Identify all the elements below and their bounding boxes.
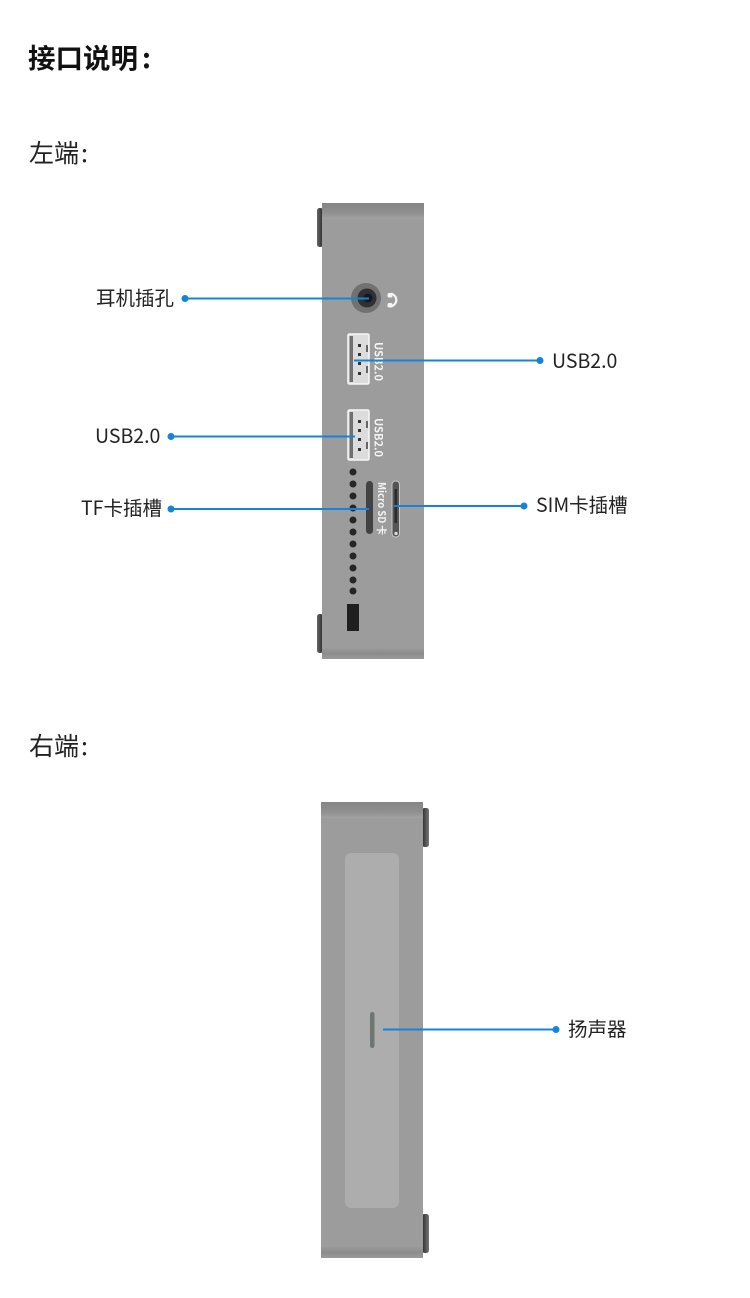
callout: USB2.0 left xyxy=(95,420,355,449)
callout: TF card slot: TF卡插槽 xyxy=(81,492,162,521)
vent holes xyxy=(350,468,356,594)
USB label bottom: USB2.0 xyxy=(370,418,386,457)
callout: SIM card slot xyxy=(394,489,628,518)
callout: headphone jack xyxy=(96,282,369,311)
callout: SIM card slot: SIM卡插槽 xyxy=(536,489,628,518)
device feet xyxy=(317,208,323,653)
heading: left side: 左端: xyxy=(29,134,88,170)
callout: USB2.0 left: USB2.0 xyxy=(95,420,160,449)
device: right side view xyxy=(321,802,429,1258)
speaker panel xyxy=(345,853,399,1208)
USB port bottom xyxy=(348,410,369,460)
SIM card slot xyxy=(392,481,400,537)
USB port top xyxy=(348,334,369,384)
power switch xyxy=(347,604,359,631)
device feet xyxy=(422,808,429,1253)
device body xyxy=(321,802,423,1258)
device: left side view xyxy=(317,203,424,659)
callout: speaker: 扬声器 xyxy=(568,1013,627,1042)
device body xyxy=(322,203,424,659)
callout: USB2.0 right xyxy=(354,345,617,374)
callout: headphone jack: 耳机插孔 xyxy=(96,282,174,311)
USB label top: USB2.0 xyxy=(370,342,386,381)
icon: headphones xyxy=(388,293,396,308)
callout: TF card slot xyxy=(81,492,369,521)
heading: right side: 右端: xyxy=(29,727,88,763)
speaker slot xyxy=(370,1012,374,1048)
headphone jack xyxy=(351,283,381,313)
title: 接口说明: xyxy=(28,36,151,76)
Micro SD label: Micro SD 卡 xyxy=(374,482,389,535)
callout: USB2.0 right: USB2.0 xyxy=(552,345,617,374)
callout: speaker xyxy=(383,1013,627,1042)
TF card slot xyxy=(366,481,373,534)
